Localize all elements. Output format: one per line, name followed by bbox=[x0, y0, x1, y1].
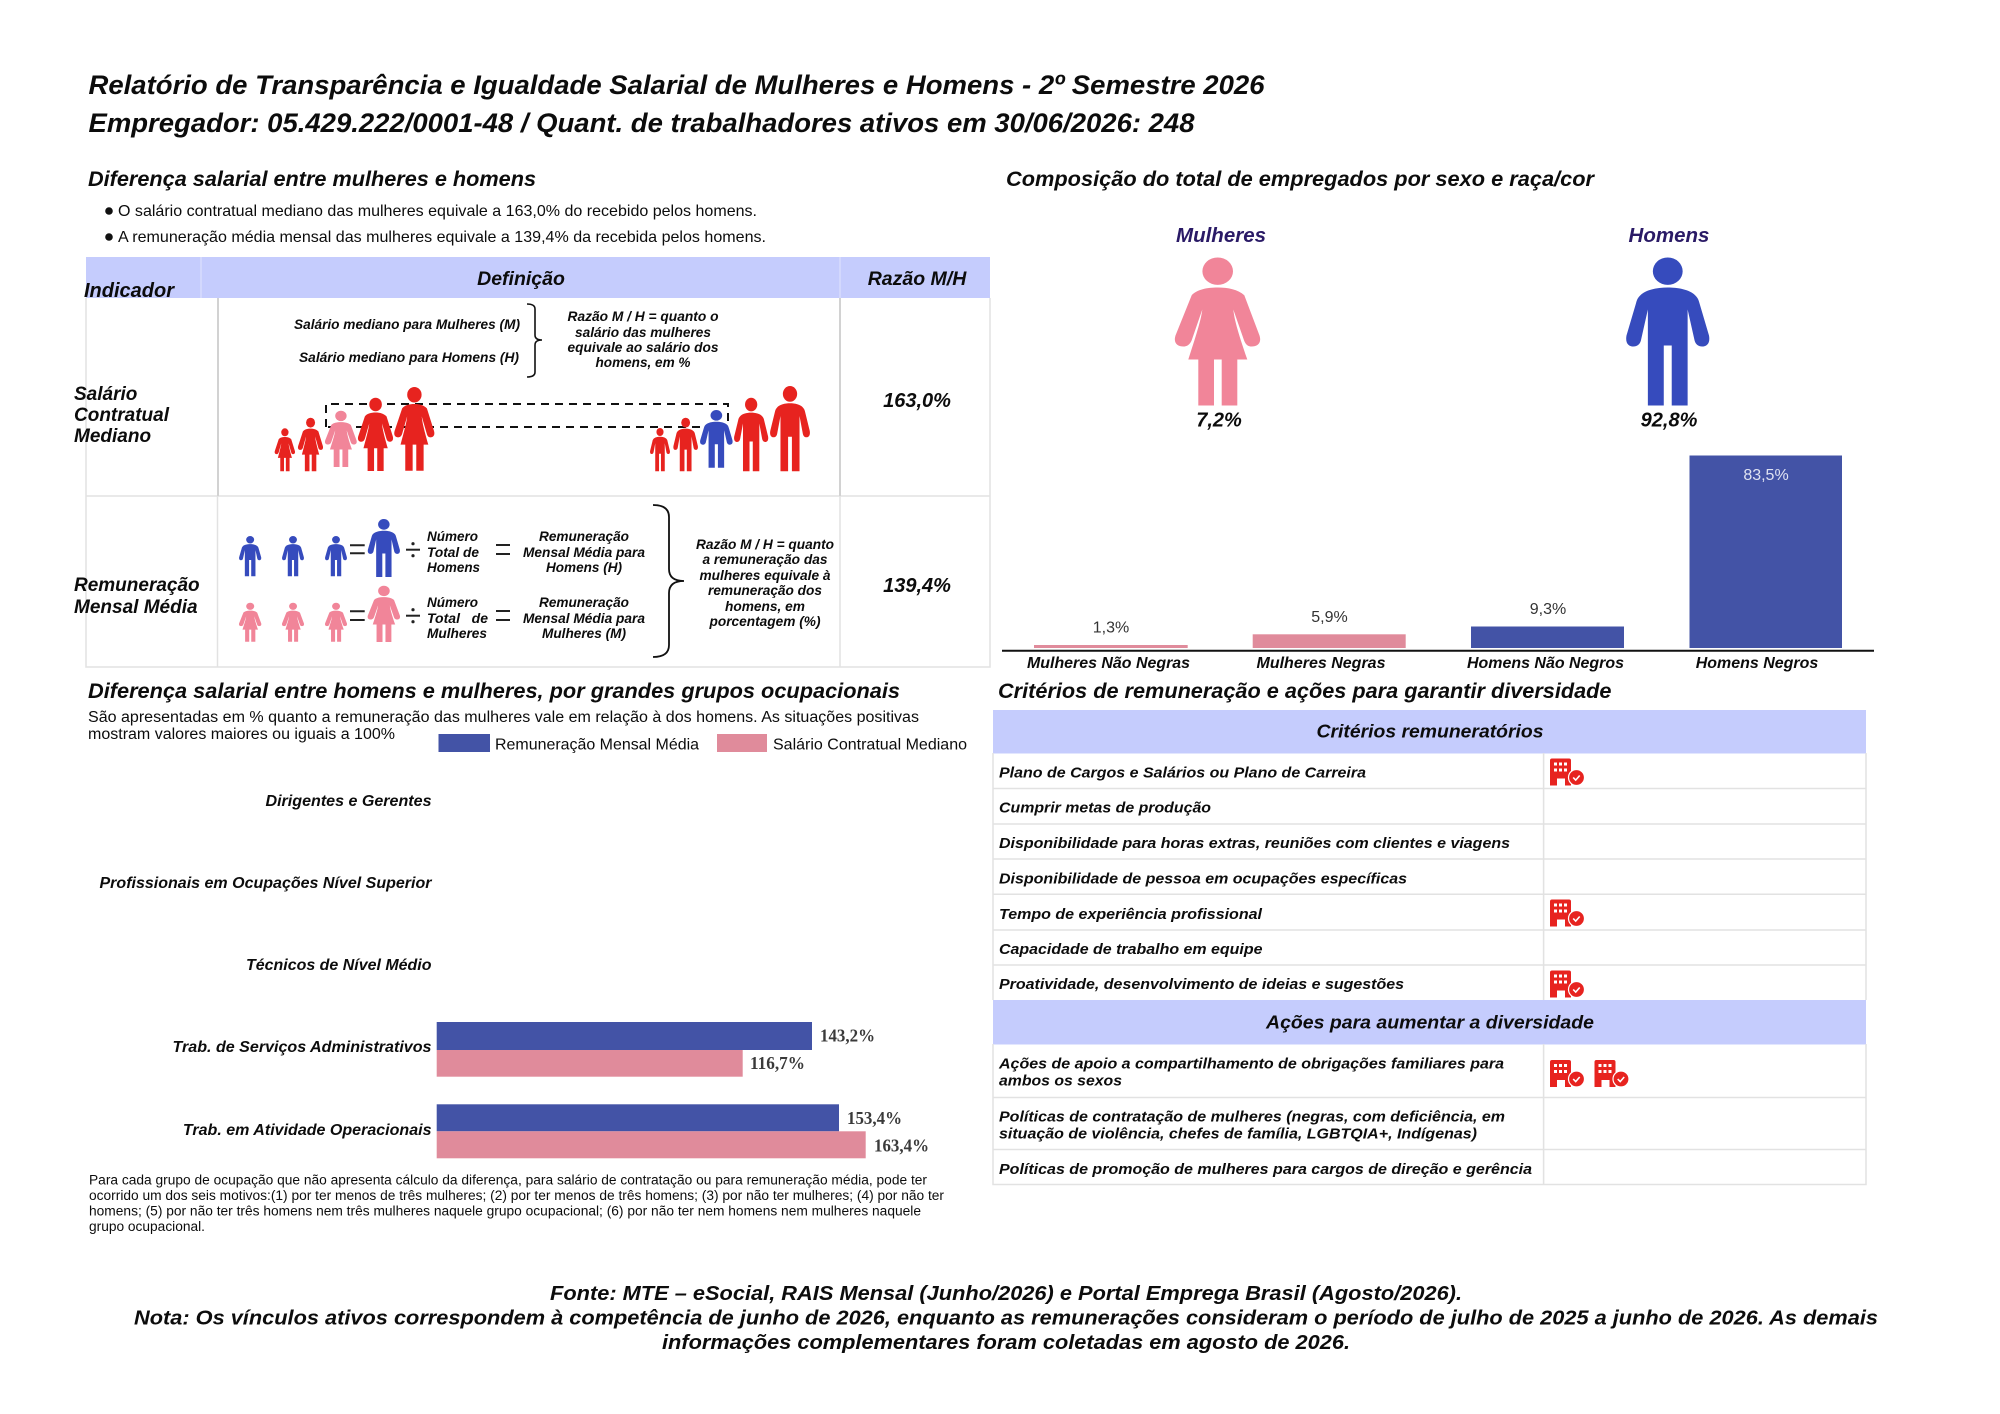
table: ações para aumentar a diversidade bbox=[993, 1000, 1866, 1184]
row: salário contratual mediano: homens, em % bbox=[596, 354, 691, 370]
footer: fonte e nota: Fonte: MTE – eSocial, RAIS Mensal (Junho/2026) e Portal Emprega Brasil (Agosto/2026). bbox=[550, 1282, 1462, 1305]
table header bbox=[84, 257, 990, 302]
row: remuneração mensal média: remuneração dos bbox=[708, 582, 822, 598]
bar chart: composição por raça/cor: Homens Não Negros bbox=[1467, 655, 1624, 672]
table header: Definição bbox=[477, 268, 565, 290]
footnote: motivos bbox=[89, 1172, 945, 1234]
row: salário contratual mediano bbox=[74, 304, 951, 471]
footnote: motivos: homens; (5) por não ter três homens nem três mulheres naquele grupo ocupacional; (6) por não ter nem homens nem mulheres naquele bbox=[89, 1204, 921, 1218]
row: remuneração mensal média: Homens (H) bbox=[546, 559, 622, 575]
bar chart: composição por raça/cor: Homens Negros bbox=[1696, 655, 1819, 672]
table: ações para aumentar a diversidade: Ações para aumentar a diversidade bbox=[1265, 1012, 1594, 1032]
footer: fonte e nota: Nota: Os vínculos ativos correspondem à competência de junho de 2026, enquanto as remunerações consideram o período de julho de 2025 a junho de 2026. As demais bbox=[134, 1306, 1878, 1330]
row: salário contratual mediano: Mediano bbox=[74, 426, 151, 447]
subtitle: São apresentadas em % quanto a remuneração das mulheres vale em relação à dos homens. As situações positivas bbox=[88, 709, 919, 726]
row: remuneração mensal média: Total de bbox=[427, 544, 479, 560]
figure: homens 92,8%: 92,8% bbox=[1641, 410, 1698, 432]
bar chart: composição por raça/cor: 1,3% bbox=[1093, 620, 1129, 637]
bar chart: composição por raça/cor: 9,3% bbox=[1530, 601, 1566, 618]
table: critérios remuneratórios: Proatividade, desenvolvimento de ideias e sugestões bbox=[999, 976, 1404, 993]
row: salário contratual mediano: Salário mediano para Mulheres (M) bbox=[294, 316, 520, 332]
panel: grupos ocupacionais bbox=[88, 679, 967, 1234]
panel: composição do total de empregados bbox=[1002, 167, 1874, 672]
table: ações para aumentar a diversidade: ambos os sexos bbox=[999, 1073, 1122, 1090]
row: remuneração mensal média: porcentagem (%) bbox=[709, 613, 821, 629]
legend: Salário Contratual Mediano bbox=[773, 737, 967, 754]
row: remuneração mensal média: Número bbox=[427, 594, 478, 610]
row: remuneração mensal média: Total de bbox=[427, 610, 488, 626]
row: remuneração mensal média: Mulheres (M) bbox=[542, 625, 626, 641]
bar chart: grupos ocupacionais bbox=[100, 793, 929, 1158]
figure: homens 92,8%: Homens bbox=[1629, 224, 1709, 247]
table: critérios remuneratórios: Critérios remuneratórios bbox=[1316, 720, 1544, 742]
bar chart: grupos ocupacionais: 153,4% bbox=[847, 1108, 902, 1128]
figure: mulheres 7,2% bbox=[1175, 224, 1266, 432]
row: salário contratual mediano: Salário mediano para Homens (H) bbox=[299, 349, 519, 365]
footnote: motivos: Para cada grupo de ocupação que não apresenta cálculo da diferença, para salário de contratação ou para remuneração média, pode ter bbox=[89, 1172, 928, 1188]
table: ações para aumentar a diversidade: Políticas de contratação de mulheres (negras, com deficiência, em bbox=[999, 1108, 1505, 1126]
heading: composição: Composição do total de empregados por sexo e raça/cor bbox=[1006, 167, 1596, 191]
legend bbox=[438, 734, 967, 754]
bar chart: grupos ocupacionais: 163,4% bbox=[874, 1136, 929, 1156]
bar chart: grupos ocupacionais: Profissionais em Ocupações Nível Superior bbox=[100, 875, 432, 892]
bar chart: composição por raça/cor: 5,9% bbox=[1311, 609, 1348, 626]
bar chart: composição por raça/cor bbox=[1002, 456, 1874, 672]
row: remuneração mensal média: a remuneração das bbox=[702, 551, 828, 567]
panel: critérios de remuneração e ações bbox=[993, 679, 1866, 1184]
figure: homens 92,8% bbox=[1626, 224, 1709, 432]
subtitle: mostram valores maiores ou iguais a 100% bbox=[88, 726, 395, 743]
panel: diferença salarial entre mulheres e homens bbox=[74, 167, 990, 667]
bar chart: composição por raça/cor: Mulheres Negras bbox=[1256, 655, 1386, 672]
bar chart: grupos ocupacionais: Trab. de Serviços Administrativos bbox=[172, 1039, 432, 1056]
footer: fonte e nota: informações complementares foram coletadas em agosto de 2026. bbox=[662, 1331, 1350, 1354]
bar chart: grupos ocupacionais: Técnicos de Nível Médio bbox=[246, 957, 432, 974]
row: remuneração mensal média: Mensal Média para bbox=[523, 610, 645, 626]
bar chart: composição por raça/cor: 83,5% bbox=[1743, 467, 1789, 484]
bar chart: grupos ocupacionais: Trab. em Atividade Operacionais bbox=[183, 1122, 432, 1139]
table: ações para aumentar a diversidade: Políticas de promoção de mulheres para cargos de direção e gerência bbox=[999, 1161, 1532, 1178]
row: remuneração mensal média: Remuneração bbox=[539, 528, 629, 544]
figure: mulheres 7,2%: 7,2% bbox=[1196, 410, 1242, 432]
indicator table bbox=[74, 257, 990, 667]
heading: grupos ocupacionais: Diferença salarial entre homens e mulheres, por grandes grupos ocupacionais bbox=[88, 679, 900, 703]
table: critérios remuneratórios: Tempo de experiência profissional bbox=[999, 906, 1263, 923]
footer: fonte e nota bbox=[134, 1282, 1878, 1354]
table: critérios remuneratórios bbox=[993, 710, 1866, 1000]
row: remuneração mensal média: Homens bbox=[427, 559, 480, 575]
figure: mulheres 7,2%: Mulheres bbox=[1176, 224, 1266, 247]
table: critérios remuneratórios: Capacidade de trabalho em equipe bbox=[999, 941, 1262, 958]
bar chart: grupos ocupacionais: 143,2% bbox=[820, 1026, 875, 1046]
row: remuneração mensal média: Mensal Média bbox=[74, 597, 198, 618]
table header: Indicador bbox=[84, 280, 175, 302]
title bbox=[88, 70, 1266, 138]
row: salário contratual mediano: equivale ao salário dos bbox=[568, 339, 719, 355]
table: critérios remuneratórios: Plano de Cargos e Salários ou Plano de Carreira bbox=[999, 764, 1366, 782]
bullet texts: O salário contratual mediano das mulheres equivale a 163,0% do recebido pelos homens. bbox=[118, 203, 757, 220]
subtitle bbox=[88, 709, 919, 743]
bar chart: grupos ocupacionais: Dirigentes e Gerentes bbox=[266, 793, 432, 810]
heading: critérios: Critérios de remuneração e ações para garantir diversidade bbox=[998, 679, 1612, 703]
row: remuneração mensal média: Mulheres bbox=[427, 625, 487, 641]
row: salário contratual mediano: 163,0% bbox=[883, 390, 951, 412]
table: critérios remuneratórios: Disponibilidade de pessoa em ocupações específicas bbox=[999, 870, 1407, 888]
table: ações para aumentar a diversidade: Ações de apoio a compartilhamento de obrigações familiares para bbox=[998, 1055, 1504, 1072]
bar chart: grupos ocupacionais: 116,7% bbox=[750, 1053, 805, 1073]
table: critérios remuneratórios: Disponibilidade para horas extras, reuniões com clientes e viagens bbox=[999, 835, 1510, 852]
row: salário contratual mediano: Salário bbox=[74, 384, 137, 405]
row: remuneração mensal média: mulheres equivale à bbox=[700, 567, 831, 583]
legend: Remuneração Mensal Média bbox=[495, 737, 699, 754]
bullet texts: A remuneração média mensal das mulheres equivale a 139,4% da recebida pelos homens. bbox=[118, 229, 766, 246]
table header: Razão M/H bbox=[868, 268, 967, 290]
row: remuneração mensal média: homens, em bbox=[725, 598, 805, 614]
title: Empregador: 05.429.222/0001-48 / Quant. de trabalhadores ativos em 30/06/2026: 248 bbox=[88, 108, 1194, 138]
heading: diferença salarial: Diferença salarial entre mulheres e homens bbox=[88, 167, 536, 191]
row: remuneração mensal média: Número bbox=[427, 528, 478, 544]
row: remuneração mensal média: 139,4% bbox=[883, 575, 951, 597]
row: remuneração mensal média: Remuneração bbox=[74, 575, 200, 596]
bullet texts bbox=[105, 203, 766, 246]
row: remuneração mensal média: Razão M / H = quanto bbox=[696, 536, 834, 552]
table: ações para aumentar a diversidade: situação de violência, chefes de família, LGBTQIA+, Indígenas) bbox=[999, 1126, 1477, 1143]
row: remuneração mensal média: Remuneração bbox=[539, 594, 629, 610]
footnote: motivos: ocorrido um dos seis motivos:(1) por ter menos de três mulheres; (2) por ter menos de três homens; (3) por não ter mulheres; (4) por não ter bbox=[89, 1188, 945, 1203]
bar chart: composição por raça/cor: Mulheres Não Negras bbox=[1027, 655, 1190, 672]
row: salário contratual mediano: Razão M / H = quanto o bbox=[568, 308, 719, 324]
row: remuneração mensal média bbox=[74, 505, 951, 657]
row: salário contratual mediano: Contratual bbox=[74, 405, 170, 426]
row: remuneração mensal média: Mensal Média para bbox=[523, 544, 645, 560]
footnote: motivos: grupo ocupacional. bbox=[89, 1219, 205, 1234]
title: Relatório de Transparência e Igualdade Salarial de Mulheres e Homens - 2º Semestre 2026 bbox=[88, 70, 1266, 100]
table: critérios remuneratórios: Cumprir metas de produção bbox=[999, 800, 1211, 816]
row: salário contratual mediano: salário das mulheres bbox=[575, 324, 711, 340]
